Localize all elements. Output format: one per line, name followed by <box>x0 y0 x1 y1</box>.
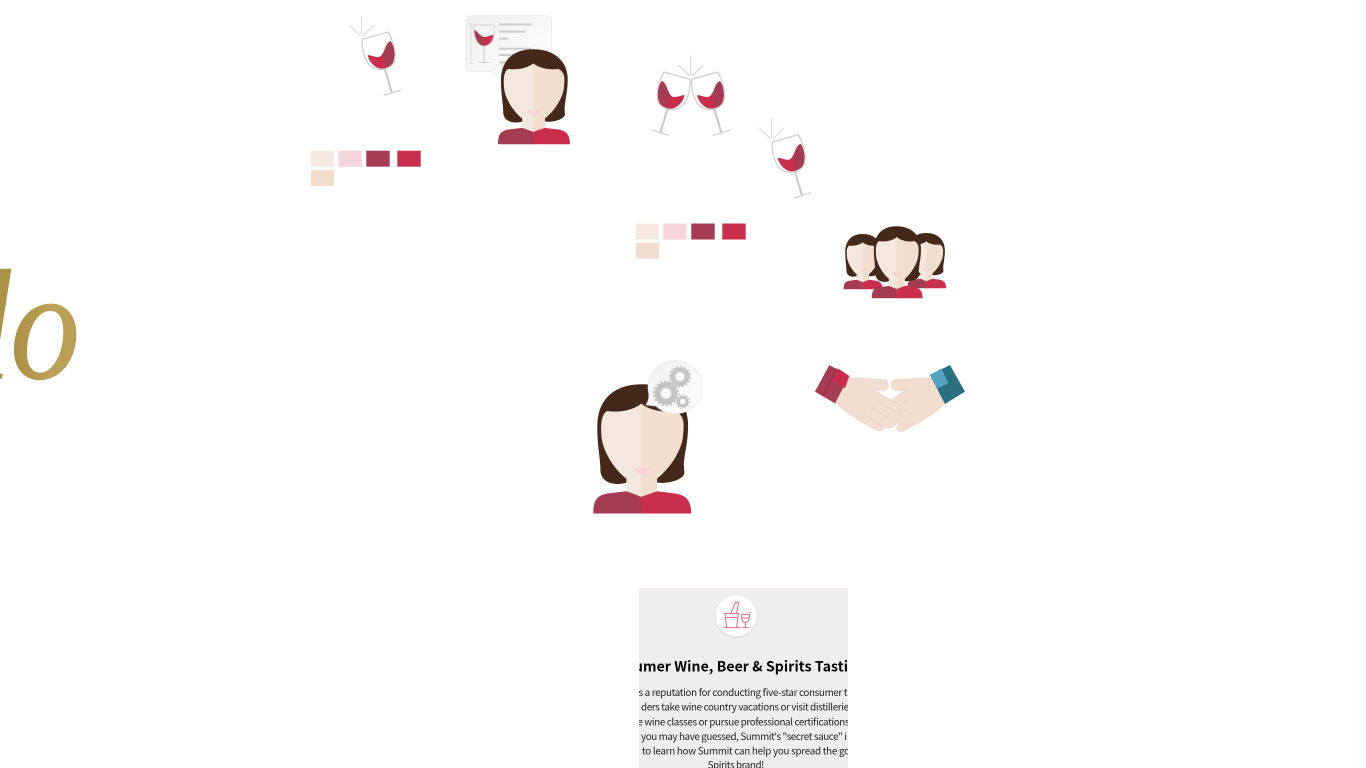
icon: woman thinking with gears <box>593 361 702 514</box>
colour swatches 1 <box>311 151 421 186</box>
panel body <box>638 685 850 768</box>
faint scrollbar band <box>1354 0 1366 768</box>
icon: handshake <box>815 365 965 431</box>
icon: single wine glass <box>349 16 401 95</box>
icon: group of three women <box>844 226 946 298</box>
icon: person with tasting notes <box>466 16 570 144</box>
icon: clinking glasses <box>652 56 730 135</box>
woman avatar large <box>593 384 691 514</box>
right hand <box>891 378 945 431</box>
woman avatar <box>498 49 570 144</box>
infographic canvas <box>0 16 965 768</box>
icon: wine bucket badge <box>716 595 757 636</box>
colour swatches 2 <box>636 224 746 259</box>
icon: second wine glass <box>759 119 811 198</box>
panel body: e wine classes or pursue professional certifications <box>638 714 850 728</box>
panel body: you may have guessed, Summit's "secret sauce" i <box>641 729 847 743</box>
panel text <box>634 656 850 768</box>
left cuff <box>815 365 849 403</box>
panel body: s a reputation for conducting five-star consumer t <box>638 685 848 699</box>
panel body: to learn how Summit can help you spread the go <box>642 743 850 757</box>
tasting notes bubble <box>466 16 552 75</box>
left hand <box>835 378 901 431</box>
gears bubble <box>646 361 702 414</box>
right cuff <box>930 365 965 404</box>
panel: consumer tastings <box>634 588 850 768</box>
panel heading: umer Wine, Beer & Spirits Tasti <box>634 656 848 676</box>
panel body: ders take wine country vacations or visit distillerie <box>641 700 850 714</box>
